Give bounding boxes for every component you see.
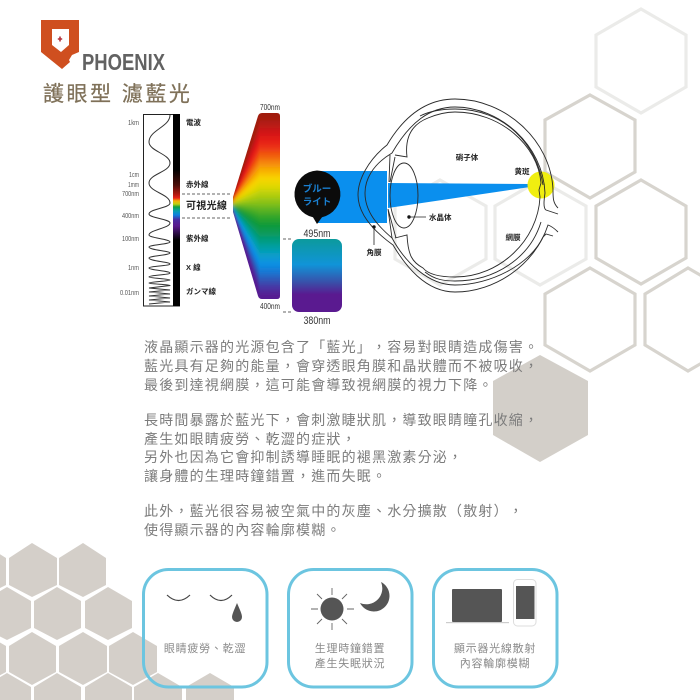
eye part labels xyxy=(366,152,530,257)
dashed connectors xyxy=(182,194,291,312)
bubble: blue light: ブルー xyxy=(303,183,331,195)
scale labels: 1cm xyxy=(129,172,139,179)
filled hexagon behind body text xyxy=(493,355,588,462)
scale labels: 400nm xyxy=(122,213,139,220)
caption: 內容輪廓模糊 xyxy=(460,656,530,670)
iris xyxy=(388,155,396,238)
choroid and cornea inner xyxy=(365,107,558,285)
body text: 讓身體的生理時鐘錯置，進而失眠。 xyxy=(144,468,387,484)
sclera and cornea outer xyxy=(358,99,558,292)
spectrum bar xyxy=(173,114,180,306)
chart: visible light fan spectrum xyxy=(233,113,280,299)
waveform xyxy=(149,115,170,304)
eye part labels: 角膜 xyxy=(366,247,382,257)
background hexagon outlines: upper right xyxy=(395,9,700,371)
label: 380nm: 380nm xyxy=(304,315,330,327)
caption xyxy=(315,641,385,670)
panel: eye fatigue xyxy=(144,570,267,687)
caption: 產生失眠狀況 xyxy=(315,656,385,670)
retina xyxy=(395,112,541,277)
wave band labels: 可視光線 xyxy=(186,199,227,212)
macula highlight xyxy=(528,172,554,198)
body text: 最後到達視網膜，這可能會導致視網膜的視力下降。 xyxy=(144,377,494,393)
retina second layer xyxy=(420,109,543,281)
filled hexagon cluster: lower left xyxy=(0,543,234,700)
eye diagram xyxy=(358,99,558,292)
blue light beam xyxy=(317,171,530,223)
body text: 使得顯示器的內容輪廓模糊。 xyxy=(144,522,342,538)
caption: 生理時鐘錯置 xyxy=(315,641,385,655)
wave band labels: 赤外線 xyxy=(186,179,209,189)
icon: closed eyes xyxy=(167,595,232,600)
eye part labels: 黄斑 xyxy=(514,166,530,176)
label: 700nm: 700nm xyxy=(260,102,280,112)
scale labels: 100nm xyxy=(122,236,139,243)
cornea pointer xyxy=(372,225,376,245)
icon: phone xyxy=(514,580,536,626)
scale labels: 1mm xyxy=(128,182,139,189)
lens pointer xyxy=(407,215,426,219)
body text: 另外也因為它會抑制誘導睡眠的褪黑激素分泌， xyxy=(144,449,463,465)
scale labels: 700nm xyxy=(122,191,139,198)
panel: display scattering xyxy=(434,570,557,687)
label: 400nm: 400nm xyxy=(260,301,280,311)
scale labels: 1nm xyxy=(128,265,139,272)
icon: moon xyxy=(360,582,389,611)
body text xyxy=(144,339,539,538)
body text: 產生如眼睛疲勞、乾澀的症狀， xyxy=(144,431,357,447)
icon: shield logo xyxy=(41,20,79,69)
scale labels xyxy=(120,120,139,297)
scale labels: 0.01nm xyxy=(120,290,139,297)
logo: PHOENIX xyxy=(41,20,166,75)
wave band labels: 電波 xyxy=(186,117,201,127)
panel: circadian disruption xyxy=(288,570,412,687)
eye part labels: 水晶体 xyxy=(429,212,452,222)
wave band labels xyxy=(186,117,227,296)
eye part labels: 硝子体 xyxy=(456,152,479,162)
bubble: blue light: ライト xyxy=(303,197,331,208)
caption: 眼睛疲勞、乾澀 xyxy=(164,641,246,655)
wordmark: PHOENIX xyxy=(82,49,166,75)
body text: 長時間暴露於藍光下，會刺激睫狀肌，導致眼睛瞳孔收縮， xyxy=(144,412,539,428)
bubble: blue light xyxy=(294,170,340,224)
wave band labels: X 線 xyxy=(186,262,201,272)
body text: 此外，藍光很容易被空氣中的灰塵、水分擴散（散射）， xyxy=(144,503,524,519)
icon: tear drop xyxy=(232,603,242,622)
icon: sun xyxy=(311,588,354,630)
body text: 藍光具有足夠的能量，會穿透眼角膜和晶狀體而不被吸收， xyxy=(144,358,539,374)
scale labels: 1km xyxy=(128,120,139,127)
icon: laptop xyxy=(446,589,509,623)
caption xyxy=(454,641,536,670)
wave band labels: ガンマ線 xyxy=(186,286,216,296)
wave box xyxy=(144,114,180,306)
eye part labels: 網膜 xyxy=(506,232,521,242)
lens xyxy=(390,163,418,228)
title: 護眼型 濾藍光 xyxy=(43,83,192,106)
blue light spectrum swatch xyxy=(292,239,342,312)
label: 495nm: 495nm xyxy=(304,228,330,240)
body text: 液晶顯示器的光源包含了「藍光」，容易對眼睛造成傷害。 xyxy=(144,339,539,355)
wave band labels: 紫外線 xyxy=(186,233,209,243)
chart: electromagnetic wave scale xyxy=(120,114,227,306)
caption: 顯示器光線散射 xyxy=(454,641,536,655)
